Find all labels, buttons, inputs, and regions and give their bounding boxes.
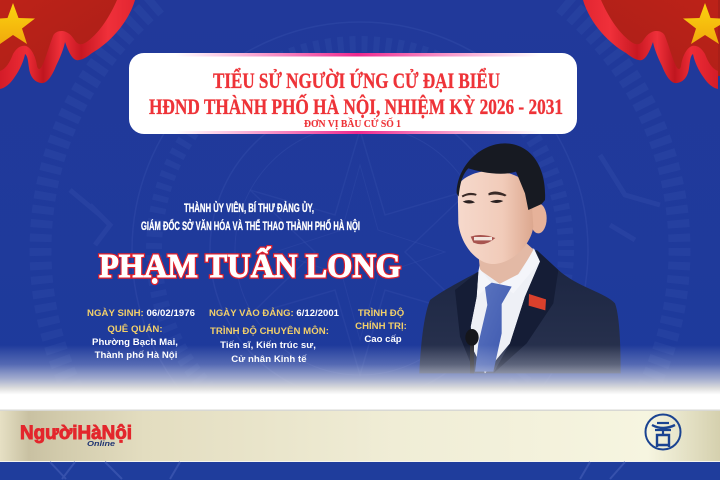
logo: Người Hà Nội Online: Online: [87, 441, 115, 448]
ear: [530, 203, 547, 233]
flag corner: left: [0, 0, 135, 89]
heading: [149, 67, 563, 130]
role text: [141, 202, 360, 233]
logo: Hanoi emblem: [646, 414, 680, 450]
hair: [457, 143, 545, 210]
lapel pin: [529, 294, 546, 310]
suit jacket: [419, 250, 621, 373]
info column: political level: TRÌNH ĐỘ: [358, 307, 405, 319]
candidate name: PHẠM TUẤN LONG: [99, 246, 401, 285]
shirt collar: [471, 248, 540, 373]
footer band: [0, 410, 720, 462]
bottom blue strip: [0, 462, 720, 480]
flag corner: right: [583, 0, 720, 89]
logo: Người Hà Nội Online: NgườiHàNội: [20, 422, 132, 444]
info column: party and education: TRÌNH ĐỘ CHUYÊN MÔN:: [210, 325, 329, 337]
title panel: [129, 53, 577, 134]
info column: party and education: [209, 307, 340, 365]
jacket lapels: [455, 250, 558, 373]
tie: [475, 283, 512, 372]
info column: birth and hometown: Thành phố Hà Nội: [95, 350, 177, 361]
info column: birth and hometown: Phường Bạch Mai,: [92, 337, 178, 348]
bottom fade: [0, 345, 720, 388]
role text: THÀNH ỦY VIÊN, BÍ THƯ ĐẢNG ỦY,: [184, 202, 314, 215]
face: [458, 171, 533, 264]
portrait photo: [419, 143, 621, 373]
heading: HĐND THÀNH PHỐ HÀ NỘI, NHIỆM KỲ 2026 - 2031: [149, 93, 563, 119]
neck: [478, 243, 534, 284]
info column: party and education: Tiến sĩ, Kiến trúc sư,: [220, 340, 316, 351]
info column: party and education: NGÀY VÀO ĐẢNG: 6/12/2001: [209, 307, 340, 319]
eyes and mouth: [462, 192, 507, 244]
microphone: [465, 329, 479, 373]
candidate name: PHẠM TUẤN LONG: [99, 246, 401, 285]
heading: ĐƠN VỊ BẦU CỬ SỐ 1: [304, 117, 401, 130]
info column: birth and hometown: NGÀY SINH: 06/02/1976: [87, 307, 195, 319]
info column: birth and hometown: [87, 307, 195, 361]
info column: birth and hometown: QUÊ QUÁN:: [107, 323, 163, 335]
info column: political level: [355, 307, 407, 345]
role text: GIÁM ĐỐC SỞ VĂN HÓA VÀ THỂ THAO THÀNH PHỐ HÀ NỘI: [141, 219, 360, 233]
info column: political level: Cao cấp: [364, 334, 402, 345]
info column: political level: CHÍNH TRỊ:: [355, 320, 407, 332]
white band: [0, 388, 720, 410]
collar flaps: [477, 249, 540, 297]
info column: party and education: Cử nhân Kinh tế: [231, 354, 307, 365]
heading: TIỂU SỬ NGƯỜI ỨNG CỬ ĐẠI BIỂU: [213, 67, 500, 93]
